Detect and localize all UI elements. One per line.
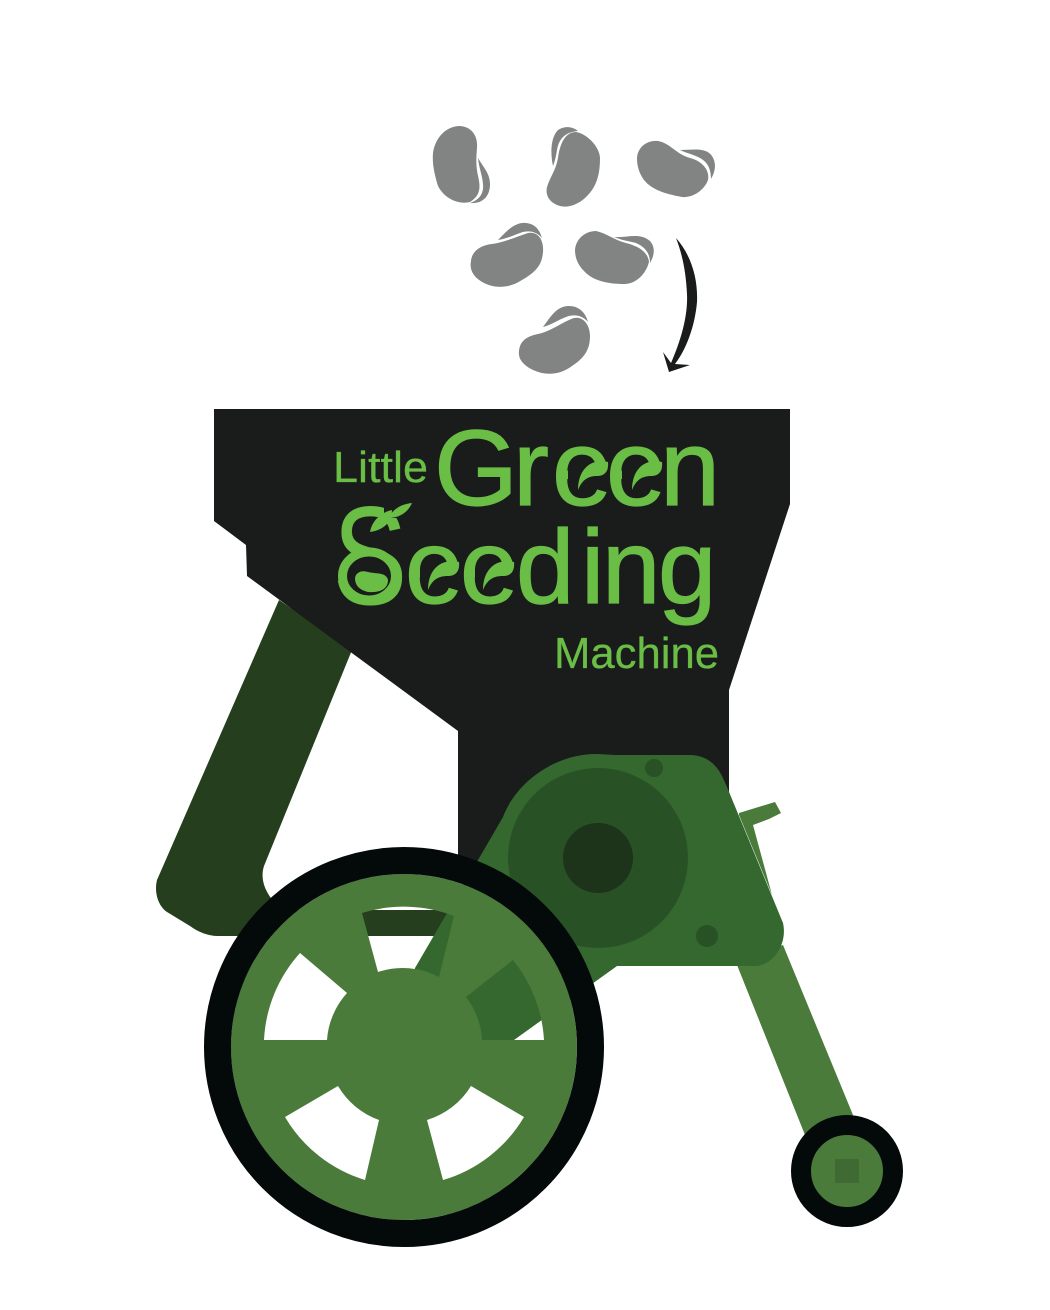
motor disc <box>508 768 688 948</box>
word: Seeding S: S <box>333 477 407 634</box>
leaf: Seeding e1 <box>428 561 459 590</box>
bolt top <box>645 759 663 777</box>
word: Machine: Machine <box>554 629 719 678</box>
seed in S <box>355 571 388 592</box>
seed 4 <box>471 223 543 287</box>
seed 1 <box>433 126 490 203</box>
letter counters cleared for leaves <box>384 470 663 582</box>
axle <box>835 1159 859 1183</box>
arrow: seeds fall into hopper <box>663 238 697 372</box>
tyre <box>801 1125 893 1217</box>
seed 6 <box>519 306 590 374</box>
hopper <box>214 409 790 880</box>
rear leg <box>156 600 450 936</box>
front arm <box>735 945 853 1135</box>
small wheel <box>801 1125 893 1217</box>
sprout leaf left <box>370 510 392 532</box>
seed 2 <box>547 127 600 207</box>
seeds falling <box>433 126 715 374</box>
rim with spoke windows <box>231 874 577 1220</box>
logo <box>333 407 720 678</box>
leaf: Green e1 <box>578 461 608 490</box>
seed swirl around the S bowl <box>342 552 396 600</box>
word: Seeding rest: eeding <box>405 509 716 626</box>
word: Green: Green <box>434 407 720 528</box>
leaf: Seeding e2 <box>483 561 514 590</box>
motor housing <box>400 754 784 1040</box>
seed 3 <box>637 141 715 197</box>
leaves and seed inside the letters <box>355 461 662 592</box>
housing plate <box>400 754 784 1040</box>
large wheel <box>218 860 590 1234</box>
bolt bottom <box>696 925 718 947</box>
leaf: Green e2 <box>632 461 662 490</box>
seed 5 <box>575 231 654 284</box>
word: Little: Little <box>333 443 428 492</box>
lever <box>739 802 781 895</box>
sprout leaf right <box>388 503 412 518</box>
tyre <box>218 860 590 1234</box>
motor hub <box>563 823 633 893</box>
